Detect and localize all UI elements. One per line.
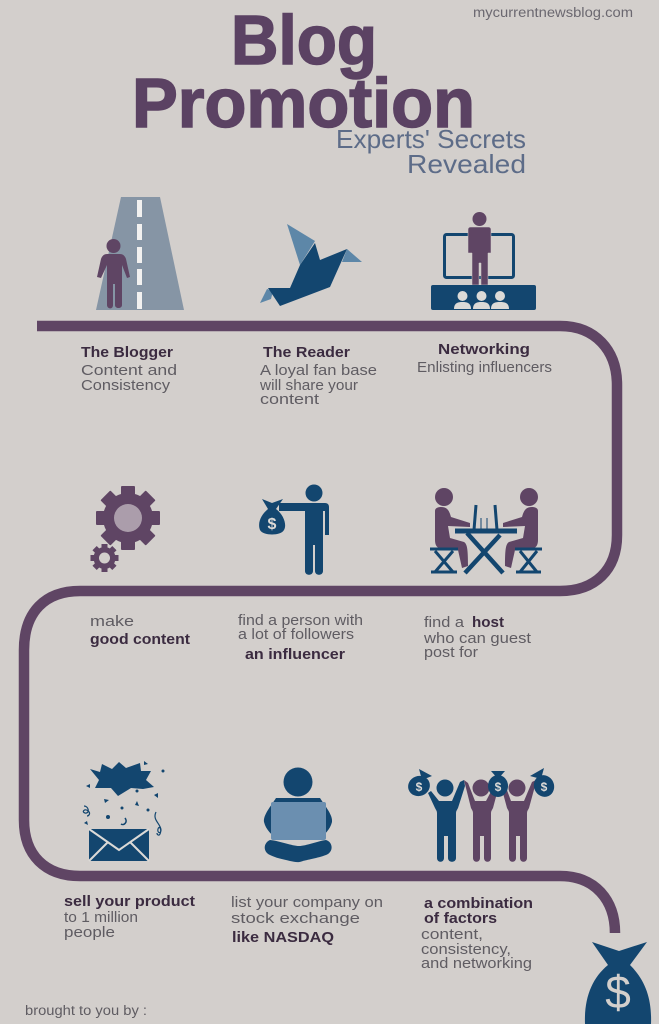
text: the blogger <box>81 344 177 394</box>
icon: final money bag <box>585 942 651 1024</box>
text: the blogger: Consistency <box>81 377 171 394</box>
text: a combination of factors: content, <box>421 926 483 943</box>
icon: three people raising money bags: $ <box>541 780 548 794</box>
text: a combination of factors: consistency, <box>421 941 511 958</box>
text: find a host: host <box>472 614 504 631</box>
icon: gears <box>90 486 160 572</box>
text: the reader: will share your <box>259 377 358 394</box>
title: Blog <box>231 1 377 79</box>
text: networking: Networking <box>438 341 530 358</box>
text: make good content: good content <box>90 631 190 648</box>
text: sell your product <box>64 893 195 941</box>
icon: influencer holding money bag <box>259 484 329 575</box>
text: the blogger: The Blogger <box>81 344 173 361</box>
text: networking <box>417 341 552 376</box>
text: a combination of factors: of factors <box>424 910 497 927</box>
title: Promotion <box>132 64 475 142</box>
text: find an influencer: a lot of followers <box>238 626 354 643</box>
text: sell your product: to 1 million <box>64 909 138 926</box>
text: make good content: make <box>90 613 134 630</box>
text: find an influencer: find a person with <box>238 612 363 629</box>
text: the reader <box>259 344 377 408</box>
icon: networking speaker and audience <box>431 212 536 310</box>
text: make good content <box>90 613 190 648</box>
text: list your company: like NASDAQ <box>232 929 334 946</box>
text: find a host <box>423 614 532 661</box>
icon: three people raising money bags: $ <box>416 780 423 794</box>
text: find a host: post for <box>424 644 478 661</box>
text: sell your product: people <box>64 924 115 941</box>
text: networking: Enlisting influencers <box>417 359 552 376</box>
icon: influencer holding money bag: $ <box>268 516 277 533</box>
icon: road with blogger <box>96 197 184 310</box>
text: a combination of factors: a combination <box>424 895 533 912</box>
text: find an influencer: an influencer <box>245 646 345 663</box>
text: a combination of factors: and networking <box>421 955 532 972</box>
icon: origami bird <box>260 224 362 306</box>
text: the reader: A loyal fan base <box>260 362 377 379</box>
text: sell your product: sell your product <box>64 893 195 910</box>
text: the blogger: Content and <box>81 362 177 379</box>
icon: final money bag: $ <box>605 966 631 1018</box>
text: find a host: who can guest <box>423 630 532 647</box>
subtitle: Experts' Secrets <box>336 124 526 154</box>
text: find an influencer <box>238 612 363 663</box>
icon: three people raising money bags <box>405 768 558 862</box>
text: the reader: The Reader <box>263 344 350 361</box>
text: list your company <box>231 894 383 946</box>
icon: three people raising money bags: $ <box>495 780 502 794</box>
footer credit: brought to you by : <box>25 1003 147 1018</box>
text: a combination of factors <box>421 895 533 972</box>
subtitle <box>336 124 526 179</box>
icon: person with laptop <box>264 768 332 862</box>
text: list your company: list your company on <box>231 894 383 911</box>
icon: envelope with confetti <box>83 761 164 861</box>
title <box>132 1 475 142</box>
icon: two people at table with laptops <box>430 488 542 573</box>
source url: mycurrentnewsblog.com <box>473 5 633 20</box>
text: list your company: stock exchange <box>231 910 360 927</box>
subtitle: Revealed <box>407 149 526 179</box>
text: the reader: content <box>260 391 320 408</box>
winding track line <box>24 326 617 933</box>
text: find a host: find a <box>424 614 465 631</box>
